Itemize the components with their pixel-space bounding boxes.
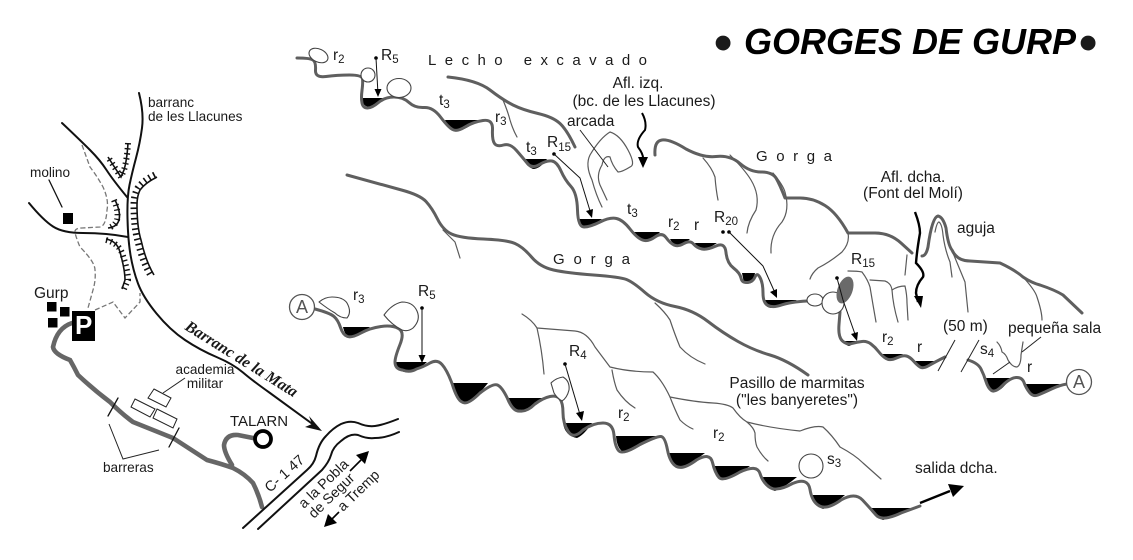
labels: profile text: Pasillo de marmitas	[729, 375, 865, 392]
labels: profile text: 5	[392, 54, 399, 66]
section 1: boulder chamber	[833, 274, 857, 306]
section 1: thin contour lines	[503, 100, 1042, 367]
river: upper tributary	[62, 123, 127, 197]
marker: A end: A	[1073, 372, 1085, 392]
break marks	[580, 130, 1041, 374]
labels: profile text: Lecho excavado	[428, 52, 647, 69]
highway C-147: C- 1 47	[262, 452, 308, 496]
marker: A start: A	[296, 297, 308, 317]
icon: parking P: P	[75, 310, 92, 340]
icon: Talarn ring	[255, 431, 271, 447]
panel: location map	[29, 93, 399, 529]
labels: profile text: Afl. dcha.	[881, 169, 945, 186]
labels: profile text: R	[418, 283, 429, 300]
panel: canyon profile	[290, 45, 1101, 520]
section 1: aguja wall	[922, 216, 1082, 313]
label: TALARN: TALARN	[230, 413, 288, 430]
labels: profile text: 2	[887, 336, 894, 348]
labels: profile text: R	[547, 134, 558, 151]
direction labels: a la Pobla	[296, 456, 352, 512]
labels: profile text: 15	[862, 258, 875, 270]
labels: profile text: (50 m)	[943, 318, 988, 335]
label: Barranc de la Mata: Barranc de la Mata	[181, 317, 301, 401]
section 1: abseil arrows	[374, 56, 858, 341]
labels: profile text: 2	[338, 54, 345, 66]
labels: profile text: aguja	[957, 220, 995, 237]
labels: profile text: 3	[631, 208, 638, 220]
labels: profile text: salida dcha.	[915, 460, 998, 477]
military academy	[131, 362, 235, 428]
labels: profile text: r	[713, 425, 718, 442]
section 2: abseil arrows	[418, 306, 584, 421]
labels: profile text: r	[882, 329, 887, 346]
road to Talarn	[224, 435, 253, 465]
military academy: academia	[176, 362, 235, 377]
arrow: right exit	[920, 484, 964, 503]
icon: village houses	[47, 302, 70, 328]
arrow: left tributary	[638, 113, 648, 168]
military academy: militar	[187, 376, 224, 391]
river: main channel Barranc de la Mata	[127, 93, 318, 428]
labels: profile text: Gorga	[553, 251, 631, 268]
road to Gurp	[53, 323, 262, 507]
labels: profile text: r	[333, 47, 338, 64]
section 2: thin contour lines	[443, 230, 881, 479]
leader: molino	[49, 180, 62, 207]
direction labels: de Segur	[306, 470, 358, 522]
section 2: pools	[343, 327, 917, 520]
labels: profile text: 2	[673, 221, 680, 233]
barriers: barreras	[103, 460, 154, 475]
labels: barranc de les Llacunes: barranc	[148, 95, 194, 110]
arrow: river flow	[305, 416, 322, 431]
labels: profile text: 4	[988, 348, 995, 360]
labels: profile text: t	[526, 139, 530, 156]
section 2: stream bed	[315, 309, 920, 518]
labels: profile text: 4	[580, 350, 587, 362]
labels: profile text: arcada	[567, 113, 615, 130]
section 1: pools	[362, 98, 1060, 396]
labels: profile text: 3	[530, 146, 537, 158]
labels: profile text: t	[627, 201, 631, 218]
label: molino: molino	[30, 165, 70, 180]
barriers	[103, 398, 179, 475]
labels: profile text: 3	[500, 116, 507, 128]
highway C-147	[243, 419, 399, 529]
labels: profile text: R	[851, 251, 862, 268]
labels: barranc de les Llacunes	[148, 95, 243, 124]
labels: profile text: r	[917, 339, 922, 356]
labels: profile text: r	[618, 405, 623, 422]
labels: profile text: s	[827, 451, 835, 468]
labels: profile text: r	[353, 287, 358, 304]
labels: profile text: R	[381, 47, 392, 64]
label: Gurp: Gurp	[34, 285, 68, 302]
section 1: stream bed	[297, 58, 807, 307]
section 1: bed after boulders	[839, 312, 945, 368]
section 1: left bank gorge wall	[655, 140, 912, 253]
labels: profile text: 5	[429, 290, 436, 302]
labels: profile text: s	[980, 341, 988, 358]
icon: mill square	[63, 213, 73, 224]
labels: profile text: r	[1027, 359, 1032, 376]
arrow: right tributary	[914, 212, 923, 308]
marker: A start	[290, 294, 314, 320]
labels: profile text: Afl. izq.	[613, 75, 663, 92]
direction labels	[296, 451, 383, 527]
labels: profile text: 3	[835, 458, 841, 470]
labels: profile text: r	[668, 214, 673, 231]
footpaths	[75, 145, 140, 318]
section 2: boulders	[319, 297, 823, 478]
labels: profile text: t	[439, 92, 443, 109]
labels: profile text: 2	[623, 412, 630, 424]
direction labels: a Tremp	[335, 467, 383, 515]
labels: profile text: (bc. de les Llacunes)	[572, 93, 716, 110]
labels: profile text: ("les banyeretes")	[736, 392, 858, 409]
gorge hatching	[106, 143, 157, 289]
river: lower tributary	[29, 203, 128, 237]
title: •	[1079, 14, 1097, 72]
labels: profile text	[333, 47, 1101, 477]
labels: profile text: (Font del Molí)	[863, 185, 963, 202]
labels: profile text: 2	[718, 432, 725, 444]
labels: profile text: 15	[558, 142, 571, 154]
labels: profile text: 3	[358, 294, 365, 306]
labels: profile text: Gorga	[756, 148, 833, 165]
section 1: upper wall	[448, 77, 575, 147]
title	[714, 14, 1097, 72]
section 2: main gorge wall	[347, 175, 808, 375]
labels: profile text: r	[694, 217, 699, 234]
marker: A end	[1066, 370, 1092, 394]
section 1: boulders	[307, 45, 844, 314]
labels: profile text: pequeña sala	[1008, 320, 1101, 337]
labels: profile text: R	[569, 343, 580, 360]
title: •	[714, 14, 732, 72]
section 1: bed after 50 m gap	[968, 360, 1067, 396]
labels: profile text: r	[495, 109, 500, 126]
labels: profile text: 3	[443, 99, 450, 111]
title: GORGES DE GURP	[744, 21, 1077, 62]
labels: profile text: R	[714, 209, 725, 226]
labels: barranc de les Llacunes: de les Llacunes	[148, 109, 243, 124]
labels: profile text: 20	[725, 216, 738, 228]
